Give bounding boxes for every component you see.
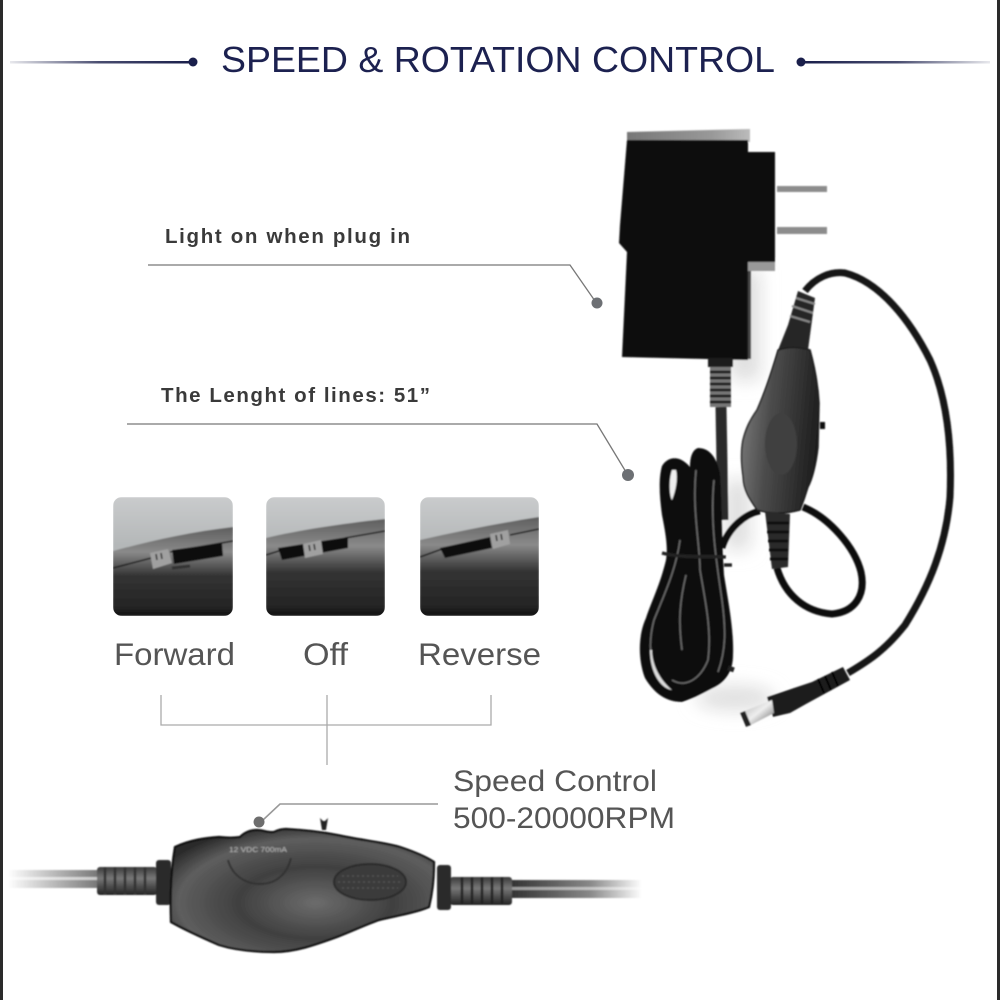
marking: 12 VDC 700mA (229, 845, 287, 854)
right strain relief (437, 865, 512, 910)
barrel plug (740, 667, 850, 727)
upper speed controller (742, 291, 825, 513)
left cord (8, 870, 98, 888)
cable tie (662, 553, 732, 565)
label: reverse: Reverse (418, 636, 541, 672)
speed control label (453, 765, 675, 835)
bracket connector (161, 695, 491, 765)
label: off: Off (303, 636, 348, 672)
controller body (171, 829, 434, 952)
speed control leader (254, 804, 438, 828)
title with side rules (10, 39, 990, 80)
dial arc (228, 858, 291, 884)
photo: power adapter with cord (619, 129, 950, 727)
coil strands (650, 470, 725, 688)
strain relief at adapter (708, 358, 733, 407)
speed control label: 500-20000RPM (453, 802, 675, 835)
callout: length of lines (127, 384, 634, 481)
adapter prongs (777, 186, 827, 234)
speed controller close-up (8, 818, 642, 952)
controller grip (765, 413, 797, 475)
switch position: reverse (418, 497, 541, 672)
long cord to barrel plug (805, 273, 950, 673)
switch position: off (266, 497, 385, 672)
soft shadows behind the adapter and cords (695, 270, 775, 710)
callout: light on when plug in (148, 225, 602, 308)
switch nub (320, 818, 328, 830)
cord from adapter (721, 407, 723, 520)
coiled cord bundle (640, 448, 734, 702)
highlight gaps in the coil (670, 470, 677, 500)
title with side rules: SPEED & ROTATION CONTROL (221, 39, 775, 80)
callout: light on when plug in: Light on when plug in (165, 225, 410, 248)
right cord (512, 880, 642, 898)
lower cord loop (722, 507, 862, 614)
textured grip (334, 864, 406, 900)
label: forward: Forward (114, 636, 235, 672)
lower strain relief (765, 512, 790, 569)
switch position: forward (113, 497, 235, 672)
left strain relief (97, 860, 171, 905)
callout: length of lines: The Lenght of lines: 51” (161, 384, 430, 407)
speed control label: Speed Control (453, 765, 657, 798)
adapter body (619, 129, 775, 360)
